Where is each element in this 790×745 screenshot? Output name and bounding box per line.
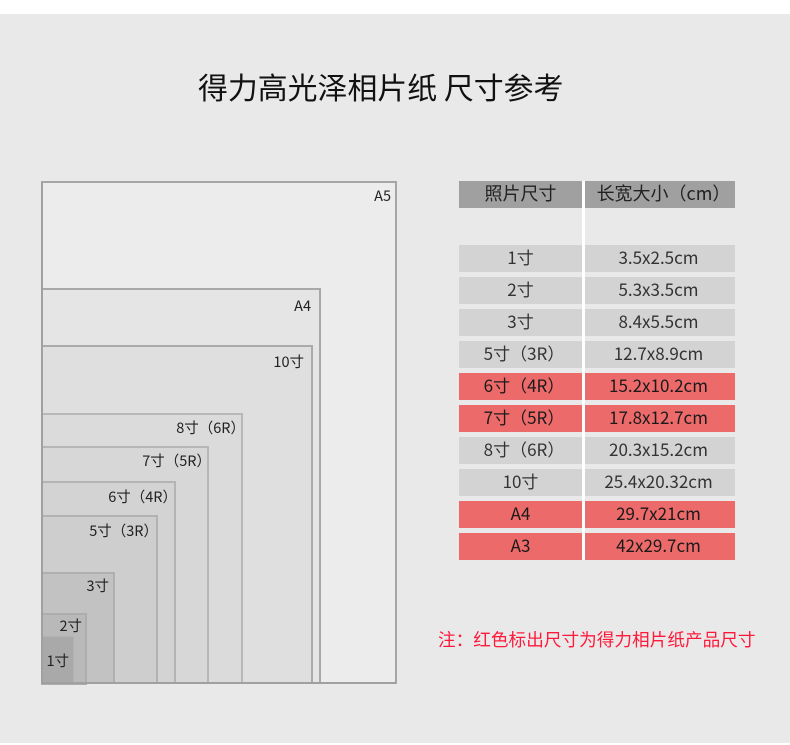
size 8 inch: 8寸（6R） [176, 417, 245, 438]
size 7 inch [42, 447, 211, 683]
row 8 size: 10寸 [503, 468, 538, 493]
row 2 size: 2寸 [507, 276, 534, 301]
row 9 dimensions highlighted: 29.7x21cm [616, 500, 701, 525]
row 7 size: 8寸（6R） [484, 436, 564, 461]
row 2 dimensions: 5.3x3.5cm [618, 276, 699, 301]
row 5 size highlighted [459, 373, 582, 400]
row 7 dimensions: 20.3x15.2cm [609, 436, 708, 461]
row 1 dimensions [585, 245, 735, 272]
row 3 size [459, 309, 582, 336]
title: 得力高光泽相片纸 尺寸参考 [198, 64, 563, 108]
size 1 inch: 1寸 [46, 650, 69, 671]
size 2 inch: 2寸 [59, 615, 82, 636]
size A4 [42, 289, 320, 683]
size A5: A5 [374, 185, 391, 206]
row 10 size highlighted: A3 [511, 532, 530, 557]
size 5 inch: 5寸（3R） [89, 520, 158, 541]
row 6 size highlighted: 7寸（5R） [484, 404, 564, 429]
row 4 dimensions [585, 341, 735, 368]
size 5 inch [42, 516, 158, 683]
row 2 size [459, 277, 582, 304]
row 4 dimensions: 12.7x8.9cm [614, 340, 703, 365]
row 1 size: 1寸 [507, 244, 534, 269]
row 10 dimensions highlighted: 42x29.7cm [616, 532, 701, 557]
size 6 inch: 6寸（4R） [108, 486, 177, 507]
size 10 inch [42, 346, 312, 683]
size 6 inch [42, 482, 177, 683]
row 1 dimensions: 3.5x2.5cm [618, 244, 699, 269]
row 3 dimensions: 8.4x5.5cm [618, 308, 699, 333]
row 3 size: 3寸 [507, 308, 534, 333]
row 3 dimensions [585, 309, 735, 336]
row 8 dimensions [585, 469, 735, 496]
row 6 size highlighted [459, 405, 582, 432]
table header: photo size: 照片尺寸 [484, 180, 556, 206]
row 6 dimensions highlighted [585, 405, 735, 432]
size 7 inch: 7寸（5R） [142, 450, 211, 471]
size A4: A4 [294, 295, 311, 316]
diagram baseline and left edge [42, 182, 396, 683]
footnote: 注：红色标出尺寸为得力相片纸产品尺寸 [438, 627, 756, 652]
size 10 inch: 10寸 [273, 351, 304, 372]
row 8 size [459, 469, 582, 496]
size 2 inch [42, 614, 86, 684]
size 1 inch [42, 637, 73, 683]
row 9 dimensions highlighted [585, 501, 735, 528]
row 5 dimensions highlighted [585, 373, 735, 400]
row 2 dimensions [585, 277, 735, 304]
row 8 dimensions: 25.4x20.32cm [604, 468, 713, 493]
table header: photo size [459, 181, 582, 208]
size 3 inch [42, 573, 114, 683]
row 7 dimensions [585, 437, 735, 464]
row 10 dimensions highlighted [585, 533, 735, 560]
row 6 dimensions highlighted: 17.8x12.7cm [609, 404, 708, 429]
row 1 size [459, 245, 582, 272]
table divider [582, 181, 585, 560]
row 5 dimensions highlighted: 15.2x10.2cm [609, 372, 708, 397]
size 3 inch: 3寸 [86, 575, 109, 596]
size 8 inch [42, 414, 245, 683]
row 5 size highlighted: 6寸（4R） [484, 372, 564, 397]
table header: dimensions: 长宽大小（cm） [597, 180, 730, 206]
row 9 size highlighted: A4 [511, 500, 530, 525]
row 4 size: 5寸（3R） [484, 340, 564, 365]
row 9 size highlighted [459, 501, 582, 528]
row 10 size highlighted [459, 533, 582, 560]
row 7 size [459, 437, 582, 464]
row 4 size [459, 341, 582, 368]
